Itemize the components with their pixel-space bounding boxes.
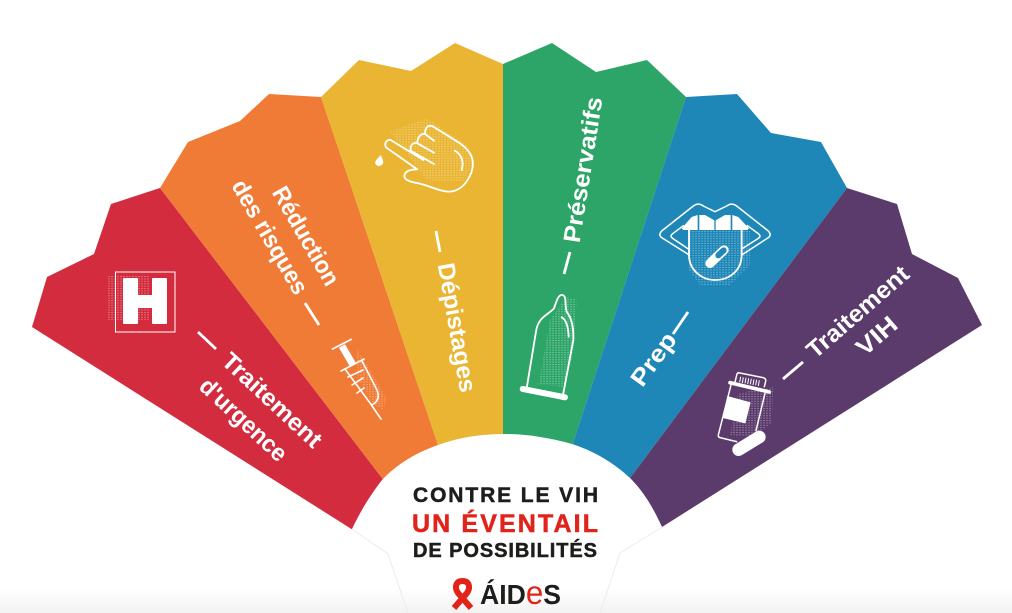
label: dépistages: Dépistages [432,261,481,395]
title [412,484,598,562]
label: réduction des risques: des risques [226,175,313,299]
icon: condom [523,295,577,397]
label: traitement d'urgence: d'urgence [194,373,293,467]
panel: dépistages [321,43,503,480]
icon: red ribbon [454,581,471,608]
label: traitement VIH: VIH [851,311,903,362]
center panel [0,434,1012,613]
icon: mouth with pill [660,204,770,285]
label: prep: Prep [625,327,682,392]
icon: finger prick hand [375,118,475,192]
dash [673,312,688,334]
dash [198,332,216,349]
label: traitement d'urgence [194,347,327,467]
title: DE POSSIBILITÉS [413,539,597,562]
icon: syringe [332,340,386,419]
label: préservatifs: Préservatifs [559,95,608,245]
title: UN ÉVENTAIL [412,509,598,538]
panel: traitement VIH [600,188,982,528]
title: CONTRE LE VIH [413,484,598,507]
panel: préservatifs [503,43,686,480]
panel: prep [560,94,847,528]
icon: pill bottle [718,373,773,450]
dash [436,231,440,252]
dash [783,362,803,379]
icon: hospital H [108,272,175,332]
panel: réduction des risques [160,94,450,528]
dash [305,303,319,325]
label: traitement VIH: Traitement [801,260,915,364]
logo wordmark: ÁIDeS [480,574,561,611]
label: réduction des risques: Réduction [266,182,345,291]
panel: traitement d'urgence [32,188,420,530]
logo: AIDES [454,574,561,611]
label: traitement d'urgence: Traitement [216,347,327,454]
dash [564,252,570,274]
